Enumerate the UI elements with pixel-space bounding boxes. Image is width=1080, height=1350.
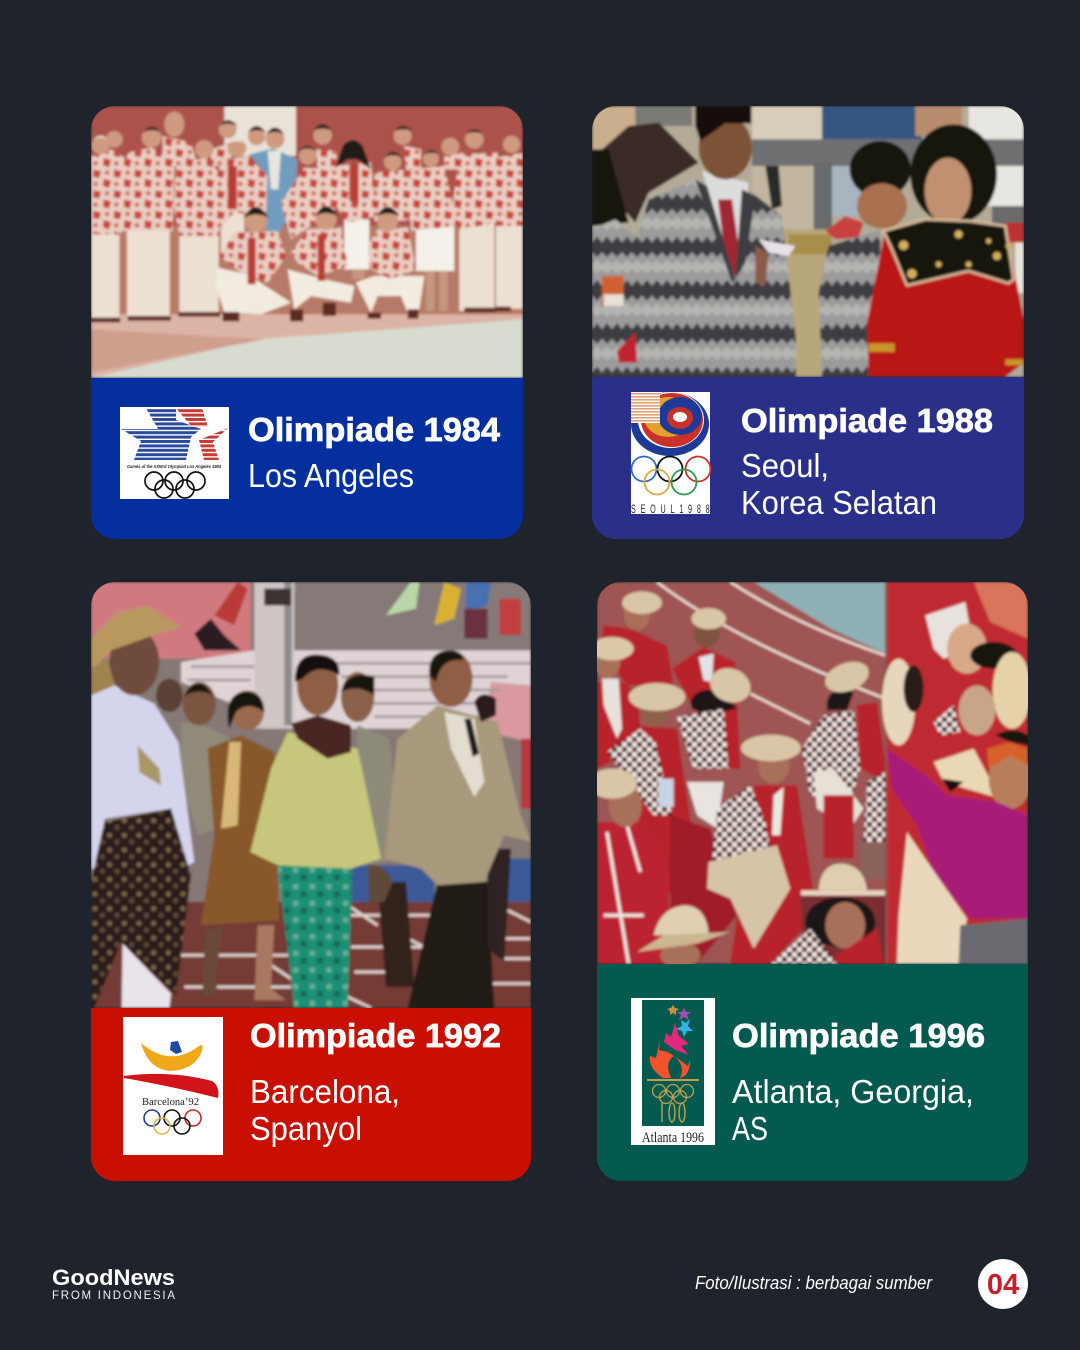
- panel: Olimpiade 1992: [91, 582, 531, 1181]
- city: Barcelona, Spanyol: [250, 1073, 400, 1147]
- logo: Barcelona 1992: Barcelona’92: [142, 1097, 199, 1108]
- city: Seoul, Korea Selatan: Seoul,: [741, 447, 829, 484]
- photo: team in red floral jackets: [91, 106, 523, 378]
- brand: GoodNews from Indonesia: [52, 1265, 175, 1302]
- caption bar: [91, 378, 523, 539]
- city: Barcelona, Spanyol: Barcelona,: [250, 1073, 400, 1110]
- heading: Olimpiade 1984: Olimpiade 1984: [248, 411, 501, 448]
- photo: Atlanta parade in red blazers and gingham: [587, 582, 1032, 969]
- photo credit: Foto/Ilustrasi : berbagai sumber: [695, 1273, 933, 1293]
- city: Atlanta, Georgia, AS: Atlanta, Georgia,: [732, 1073, 974, 1110]
- city: Los Angeles: Los Angeles: [248, 457, 414, 494]
- caption bar: [91, 1008, 531, 1181]
- brand: GoodNews from Indonesia: FROM INDONESIA: [52, 1290, 175, 1302]
- page number: 04: [987, 1269, 1019, 1301]
- logo: Seoul 1988: [631, 392, 710, 517]
- logo: Seoul 1988: SEOUL1988: [631, 503, 710, 517]
- logo: Los Angeles 1984: [120, 407, 229, 499]
- panel: Olimpiade 1996: [587, 582, 1032, 1181]
- brand: GoodNews from Indonesia: GoodNews: [52, 1265, 175, 1290]
- page number: [978, 1259, 1028, 1309]
- logo: Los Angeles 1984: Games of the XXIIIrd Olympiad Los Angeles 1984: [127, 464, 221, 469]
- heading: Olimpiade 1996: Olimpiade 1996: [732, 1017, 985, 1054]
- figures back row: [590, 591, 885, 915]
- heading: Olimpiade 1992: Olimpiade 1992: [250, 1017, 501, 1054]
- city: Seoul, Korea Selatan: [741, 447, 937, 521]
- caption bar: [592, 377, 1024, 539]
- right strip: [882, 582, 1032, 964]
- heading: Olimpiade 1988: Olimpiade 1988: [741, 402, 993, 439]
- city: Seoul, Korea Selatan: Korea Selatan: [741, 484, 937, 521]
- photo: Barcelona parade: [91, 582, 531, 1008]
- logo: Atlanta 1996: Atlanta 1996: [642, 1130, 704, 1146]
- city: Atlanta, Georgia, AS: AS: [732, 1110, 768, 1147]
- city: Atlanta, Georgia, AS: [732, 1073, 974, 1147]
- caption bar: [597, 964, 1028, 1181]
- panel: Olimpiade 1984: [91, 106, 523, 539]
- city: Barcelona, Spanyol: Spanyol: [250, 1110, 362, 1147]
- photo: Seoul parade in grey patterned suits: [592, 106, 1024, 377]
- logo: Barcelona 1992: [123, 1017, 223, 1155]
- panel: Olimpiade 1988: [592, 106, 1024, 539]
- figures front row: [587, 582, 1028, 969]
- logo: Atlanta 1996: [631, 998, 715, 1146]
